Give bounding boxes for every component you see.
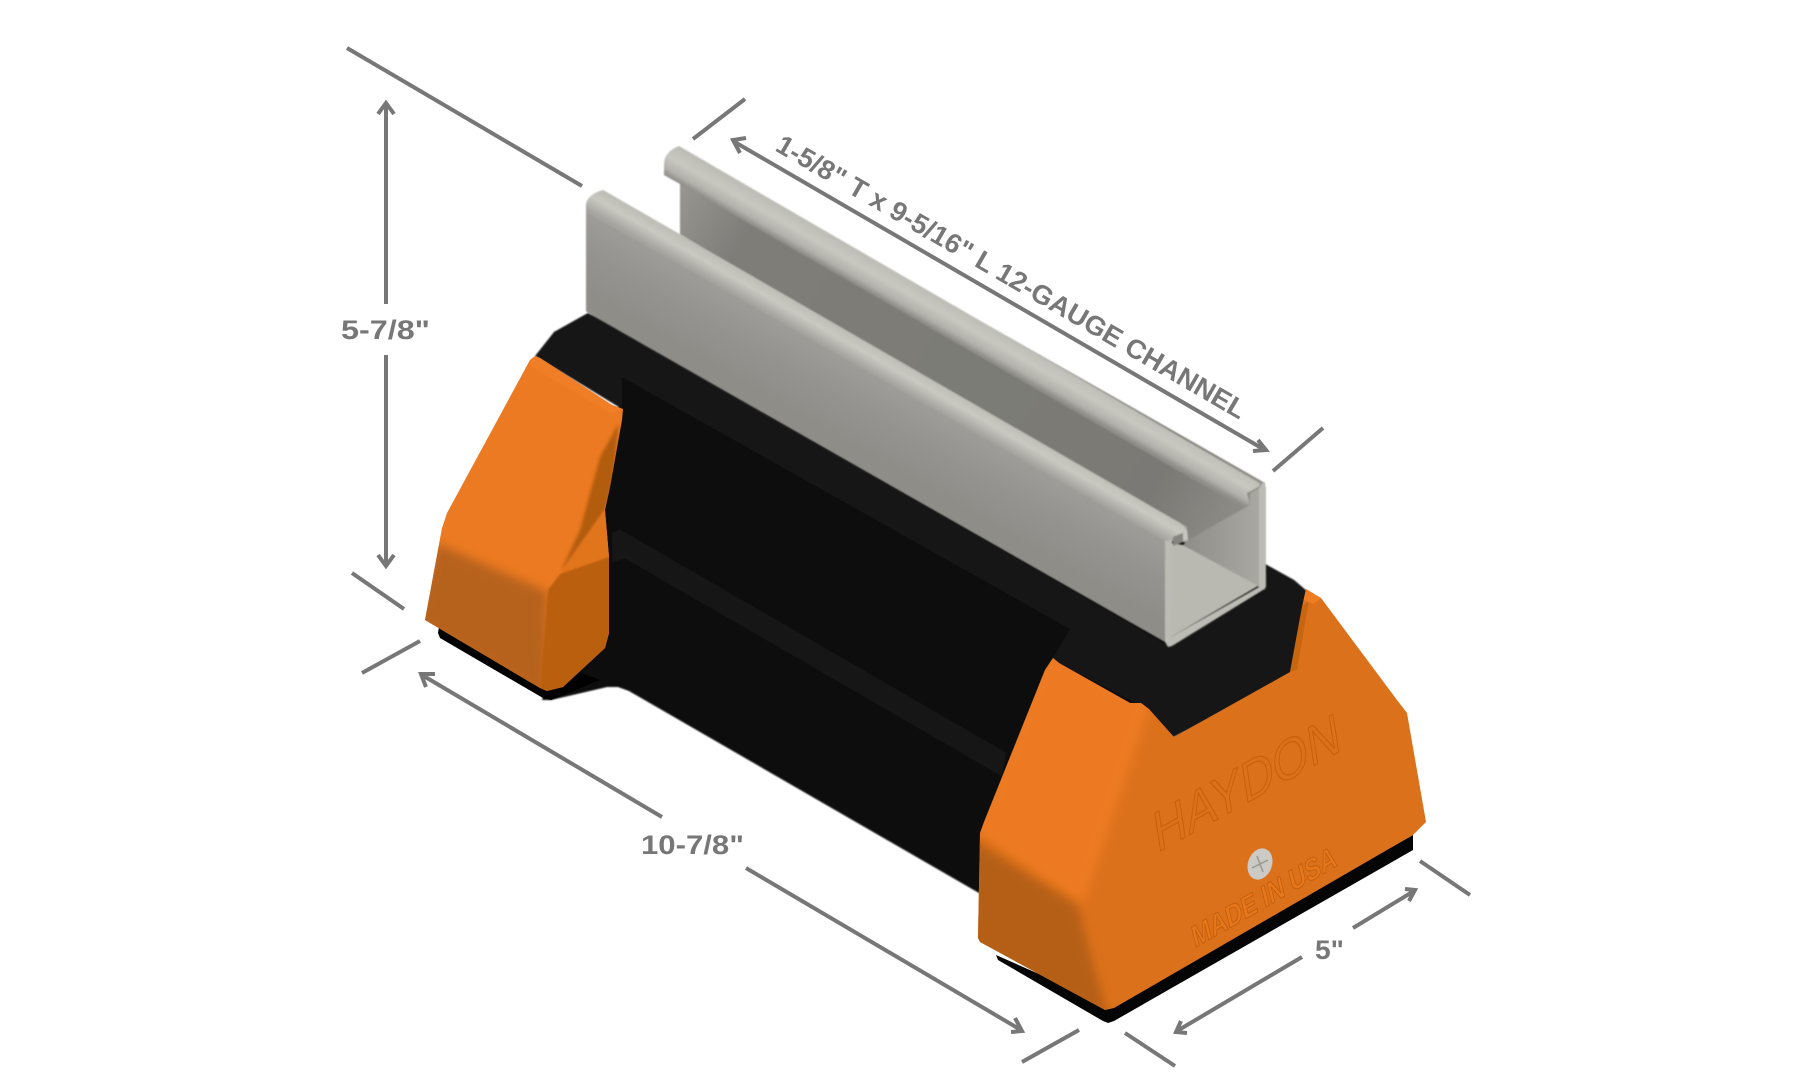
- width label: 5": [1315, 935, 1344, 965]
- side ridge: [612, 530, 1006, 776]
- screw head: [1243, 845, 1277, 883]
- left orange end cap: [415, 356, 624, 700]
- crease shadow: [560, 423, 619, 573]
- channel interior back wall: [680, 150, 1265, 590]
- height label: 5-7/8": [341, 315, 430, 345]
- shaded facets: [970, 589, 1321, 1020]
- top bright rim: [1303, 589, 1321, 604]
- channel end rim: [1165, 482, 1266, 647]
- left foot pad: [438, 620, 600, 700]
- end face of body: [1135, 580, 1308, 737]
- extension line top: [347, 48, 582, 186]
- sloped shoulder beside end face: [1053, 629, 1145, 703]
- top strip of body: [535, 313, 1294, 670]
- lower left dark facet: [978, 840, 1110, 1010]
- body side face: [539, 313, 1308, 900]
- bright left face: [975, 650, 1152, 905]
- right foot pad: [996, 835, 1413, 1023]
- outer front wall: [586, 190, 1188, 642]
- length label: 10-7/8": [641, 830, 744, 860]
- tick end: [1273, 428, 1323, 471]
- cap base shape: [978, 589, 1426, 1010]
- tick end: [1420, 861, 1470, 895]
- notch inner shadow: [1290, 600, 1309, 672]
- length arrow: [421, 674, 1022, 1032]
- right orange end cap: [970, 589, 1426, 1020]
- embossed logo: HAYDON: HAYDON: [1149, 701, 1344, 865]
- top rim highlight: [532, 356, 622, 409]
- shaded facets: [415, 356, 624, 700]
- dimension: channel length: [693, 99, 1323, 471]
- cap base shape: [425, 356, 623, 691]
- interior floor: [1171, 543, 1258, 637]
- length arrow: [733, 138, 1266, 451]
- left lower facet: [425, 540, 548, 691]
- extension line bottom: [352, 573, 404, 609]
- back lip: [664, 146, 1260, 508]
- embossed text: MADE IN USA: MADE IN USA: [1188, 839, 1340, 954]
- front hook notch: [1173, 533, 1183, 546]
- channel label: 1-5/8" T x 9-5/16" L 12-GAUGE CHANNEL: [771, 129, 1251, 425]
- tick start: [1125, 1033, 1175, 1066]
- product: support block: [415, 146, 1426, 1023]
- right lower facet: [540, 556, 612, 695]
- black base body: [535, 313, 1308, 900]
- dimension: height 5-7/8: [341, 48, 582, 609]
- front lip: [586, 190, 1188, 543]
- screw: [1243, 845, 1277, 883]
- tick start: [362, 641, 420, 673]
- dimension: width 5: [1125, 861, 1470, 1066]
- infographic: support block with dimensions: [342, 46, 1471, 1068]
- height arrow: [378, 103, 394, 566]
- dimension: length 10-7/8: [362, 641, 1079, 1062]
- tick start: [693, 99, 745, 139]
- steel channel: [586, 146, 1266, 647]
- screw slot: [1252, 856, 1268, 872]
- crease facet: [564, 511, 609, 572]
- tick end: [1022, 1030, 1079, 1062]
- width arrow: [1176, 889, 1415, 1033]
- interior end wall: [1183, 488, 1259, 587]
